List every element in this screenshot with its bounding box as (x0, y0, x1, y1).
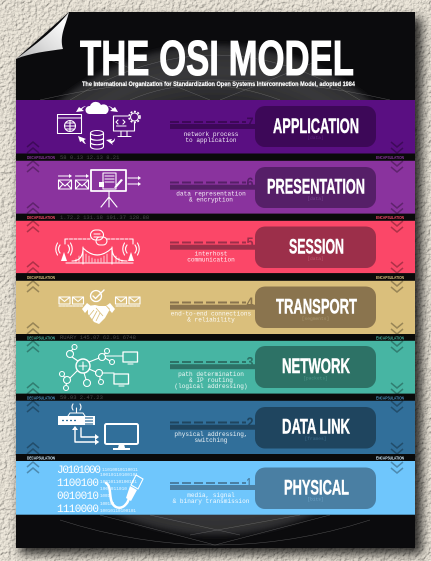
encapsulation strip labels: 1.72.2 131.18 191.37 128.88 (60, 214, 149, 221)
encapsulation strip labels: ENCAPSULATION (376, 456, 404, 460)
description: communication (187, 257, 235, 264)
label box (255, 226, 376, 268)
icon: binary stream and cable: 10010110100101 (100, 479, 137, 485)
icon: binary stream and cable: 1001011010 (100, 486, 127, 492)
icon: binary stream and cable: 11010010110011 (102, 467, 138, 473)
icon: binary stream and cable: J0101000 (57, 465, 101, 477)
panel: data link layer (16, 401, 415, 454)
icon: binary stream and cable: 10010110100101 (100, 472, 138, 478)
label box: PHYSICAL (284, 476, 349, 500)
icon: handshake (59, 290, 140, 324)
panel: network layer (16, 341, 415, 394)
label box: APPLICATION (273, 115, 359, 138)
number line (170, 294, 255, 312)
page curl (16, 12, 69, 59)
description: to application (185, 137, 237, 144)
encapsulation strip labels: DECAPSULATION (27, 275, 55, 280)
icon: binary stream and cable: 100101 (100, 501, 115, 507)
label box (255, 468, 376, 509)
panel: transport layer (16, 281, 415, 334)
encapsulation chevrons right (391, 142, 403, 473)
number line (170, 414, 255, 432)
icon: binary stream and cable: 10010110100101 (100, 508, 136, 514)
label box (255, 106, 376, 147)
label box (255, 286, 376, 328)
icon: bridge with chat (56, 230, 139, 264)
encapsulation strip labels: RUARY 145.07 62.91 6748 (60, 334, 136, 341)
label box: [packets] (303, 376, 328, 382)
number line (170, 354, 255, 371)
number line (170, 174, 255, 192)
label box: [segments] (302, 316, 329, 322)
label box: [data] (307, 256, 324, 262)
label box: [data] (307, 135, 324, 141)
label box: PRESENTATION (267, 176, 365, 198)
encapsulation strip labels: ENCAPSULATION (376, 336, 404, 340)
encapsulation strip labels: DECAPSULATION (27, 456, 55, 460)
number line: 7 (246, 114, 254, 132)
encapsulation strip labels: ENCAPSULATION (376, 275, 404, 280)
icon: presentation board (58, 170, 141, 207)
description: & IP routing (189, 377, 233, 384)
encapsulation strip labels: 59.93 2.47.23 (60, 394, 103, 401)
description: & binary transmission (173, 498, 250, 505)
number line (170, 114, 255, 132)
number line: 3 (246, 354, 254, 371)
description: end-to-end connections (171, 311, 251, 318)
number line: 2 (246, 414, 254, 432)
label box: [frames] (304, 436, 327, 442)
description: network process (184, 131, 238, 138)
encapsulation strip labels: DECAPSULATION (27, 215, 55, 220)
panel: session layer (16, 221, 415, 273)
description: & encryption (189, 197, 233, 204)
number line: 5 (246, 234, 254, 252)
description: switching (195, 437, 228, 444)
description: interhost (195, 251, 227, 258)
subtitle: The International Organization for Standardization Open Systems Interconnection Model, adopted 1984 (82, 82, 356, 88)
icon: router and monitor (58, 404, 138, 450)
encapsulation strip labels: ENCAPSULATION (376, 396, 404, 400)
encapsulation strip labels: ENCAPSULATION (376, 155, 404, 160)
icon: binary stream and cable: 0010010 (57, 491, 99, 503)
encapsulation strip labels: DECAPSULATION (27, 155, 55, 160)
label box (255, 167, 376, 208)
description: path determination (178, 371, 244, 378)
label box: DATA LINK (282, 416, 350, 438)
decapsulation chevrons left (27, 142, 39, 473)
icon: binary stream and cable: 1100100 (57, 478, 99, 490)
label box: TRANSPORT (276, 296, 357, 318)
label box: [data] (307, 196, 324, 202)
description: & reliability (187, 317, 235, 324)
panel: presentation layer (16, 161, 415, 214)
icon: network nodes (60, 344, 138, 390)
encapsulation strip labels: ENCAPSULATION (376, 215, 404, 220)
description: physical addressing, (174, 431, 248, 438)
description: data representation (176, 191, 246, 198)
number line: 6 (246, 174, 254, 192)
icon: binary stream and cable: 1001 (100, 493, 110, 499)
number line: 4 (246, 294, 254, 312)
description: (logical addressing) (174, 383, 248, 390)
panel: physical layer (16, 461, 415, 516)
icon: cloud and computers (58, 102, 140, 149)
icon: binary stream and cable (57, 465, 143, 516)
number line (170, 475, 255, 492)
encapsulation strip labels: 58 0.13 12.13 8.21 (60, 154, 120, 161)
encapsulation strip labels: DECAPSULATION (27, 336, 55, 340)
panel: application layer (16, 100, 415, 154)
icon: binary stream and cable: 1110000 (57, 504, 99, 516)
number line: 1 (246, 475, 252, 492)
label box (255, 346, 376, 388)
label box: SESSION (289, 236, 344, 258)
number line (170, 234, 255, 252)
encapsulation strip labels (16, 154, 415, 461)
encapsulation strip labels: DECAPSULATION (27, 396, 55, 400)
label box (255, 407, 376, 448)
label box: NETWORK (282, 355, 350, 378)
description: media, signal (187, 492, 235, 499)
label box: [bits] (307, 496, 324, 502)
